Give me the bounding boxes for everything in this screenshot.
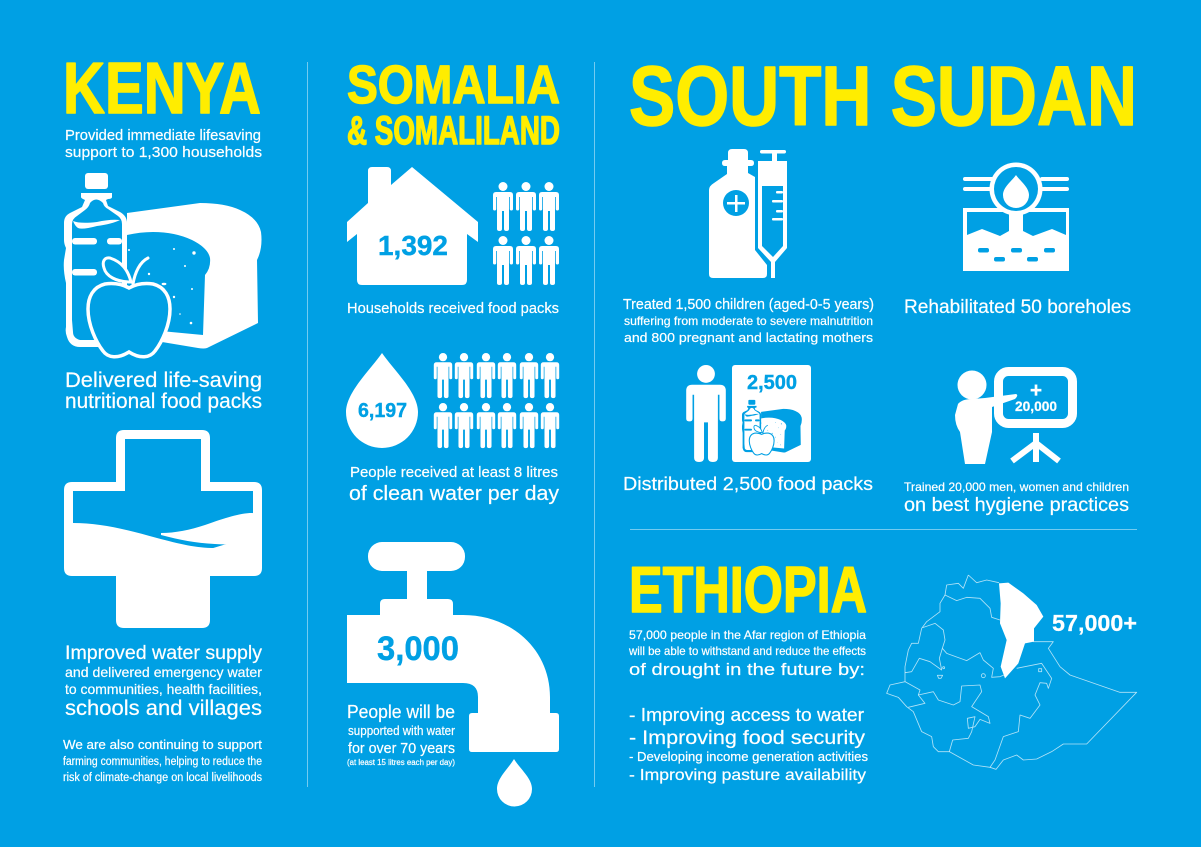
heading: Ethiopia: ETHIOPIA <box>629 553 867 626</box>
text: hygiene training: on best hygiene practices <box>904 495 1129 516</box>
icon: medicine bottle and syringe <box>709 149 787 278</box>
text: treated children: suffering from moderate to severe malnutrition <box>624 314 873 328</box>
heading: Kenya: KENYA <box>63 49 261 129</box>
icon: twelve people <box>434 353 559 448</box>
map: Ethiopia regions <box>887 575 1137 769</box>
text: list of improvements: - Improving food security <box>629 728 866 749</box>
text: people supported: supported with water <box>348 724 455 738</box>
text: people supported: for over 70 years <box>348 740 455 757</box>
text: lifesaving support <box>65 127 262 161</box>
text: households: Households received food packs <box>347 300 559 317</box>
text: water supply: schools and villages <box>65 697 262 720</box>
text: water supply: and delivered emergency water <box>65 664 262 680</box>
text: list of improvements <box>629 705 868 784</box>
icon: house with 1,392 <box>347 167 478 285</box>
icon: borehole <box>963 162 1069 271</box>
heading: Somalia and Somaliland: & SOMALILAND <box>347 109 560 153</box>
icon: six people <box>493 182 559 285</box>
panel: South Sudan <box>623 49 1137 516</box>
callout: 57,000+: 57,000+ <box>1052 610 1137 636</box>
icon: person with food pack <box>686 365 811 462</box>
text: clean water: People received at least 8 litres <box>350 464 558 481</box>
text: lifesaving support: Provided immediate lifesaving <box>65 127 261 144</box>
text: food packs <box>65 369 262 413</box>
text: Afar region: of drought in the future by: <box>629 660 865 679</box>
text: climate-change support: farming communities, helping to reduce the <box>63 756 262 768</box>
text: list of improvements: - Improving access to water <box>629 705 864 725</box>
text: people supported: People will be <box>347 702 455 722</box>
text: clean water <box>349 464 559 505</box>
panel: Kenya <box>63 49 263 784</box>
text: water supply: Improved water supply <box>65 643 262 664</box>
icon: water drop with 6,197 <box>346 353 418 448</box>
text: treated children: and 800 pregnant and lactating mothers <box>624 330 874 345</box>
panel: Somalia and Somaliland <box>346 55 560 807</box>
icon: presenter with board: + <box>1030 379 1042 402</box>
icon: tap with 3,000 <box>347 542 559 807</box>
text: people supported: (at least 15 litres each per day) <box>347 758 455 767</box>
text: clean water: of clean water per day <box>349 483 559 505</box>
icon: tap with 3,000: 3,000 <box>377 630 459 668</box>
text: water supply <box>65 643 262 720</box>
icon: presenter with board <box>955 370 1072 464</box>
text: climate-change support: risk of climate-change on local livelihoods <box>63 772 262 784</box>
heading: Somalia and Somaliland: SOMALIA <box>347 55 560 115</box>
text: Afar region <box>628 628 866 679</box>
icon: medical cross with water <box>64 430 262 628</box>
text: climate-change support <box>63 738 263 784</box>
text: list of improvements: - Developing income generation activities <box>629 750 868 764</box>
text: people supported <box>347 702 455 767</box>
heading: Somalia and Somaliland <box>347 55 560 153</box>
text: hygiene training <box>904 480 1129 516</box>
text: treated children: Treated 1,500 children (aged-0-5 years) <box>623 297 874 313</box>
icon: bottle, bread and apple <box>64 173 262 357</box>
icon: presenter with board: 20,000 <box>1015 398 1057 414</box>
text: Afar region: 57,000 people in the Afar region of Ethiopia <box>629 628 866 642</box>
icon: water drop with 6,197: 6,197 <box>358 400 407 422</box>
text: hygiene training: Trained 20,000 men, women and children <box>904 480 1129 494</box>
icon: house with 1,392: 1,392 <box>378 230 448 261</box>
text: water supply: to communities, health facilities, <box>65 681 262 697</box>
text: food packs: nutritional food packs <box>65 390 262 413</box>
text: distributed food packs: Distributed 2,500 food packs <box>623 473 873 494</box>
icon: person with food pack: 2,500 <box>747 372 797 394</box>
text: boreholes: Rehabilitated 50 boreholes <box>904 297 1131 318</box>
text: food packs: Delivered life-saving <box>65 369 262 392</box>
text: Afar region: will be able to withstand and reduce the effects <box>628 644 866 658</box>
text: treated children <box>623 297 874 345</box>
text: climate-change support: We are also continuing to support <box>63 738 263 752</box>
panel: Ethiopia <box>628 553 1137 784</box>
text: lifesaving support: support to 1,300 households <box>65 144 262 161</box>
text: list of improvements: - Improving pasture availability <box>629 767 866 784</box>
